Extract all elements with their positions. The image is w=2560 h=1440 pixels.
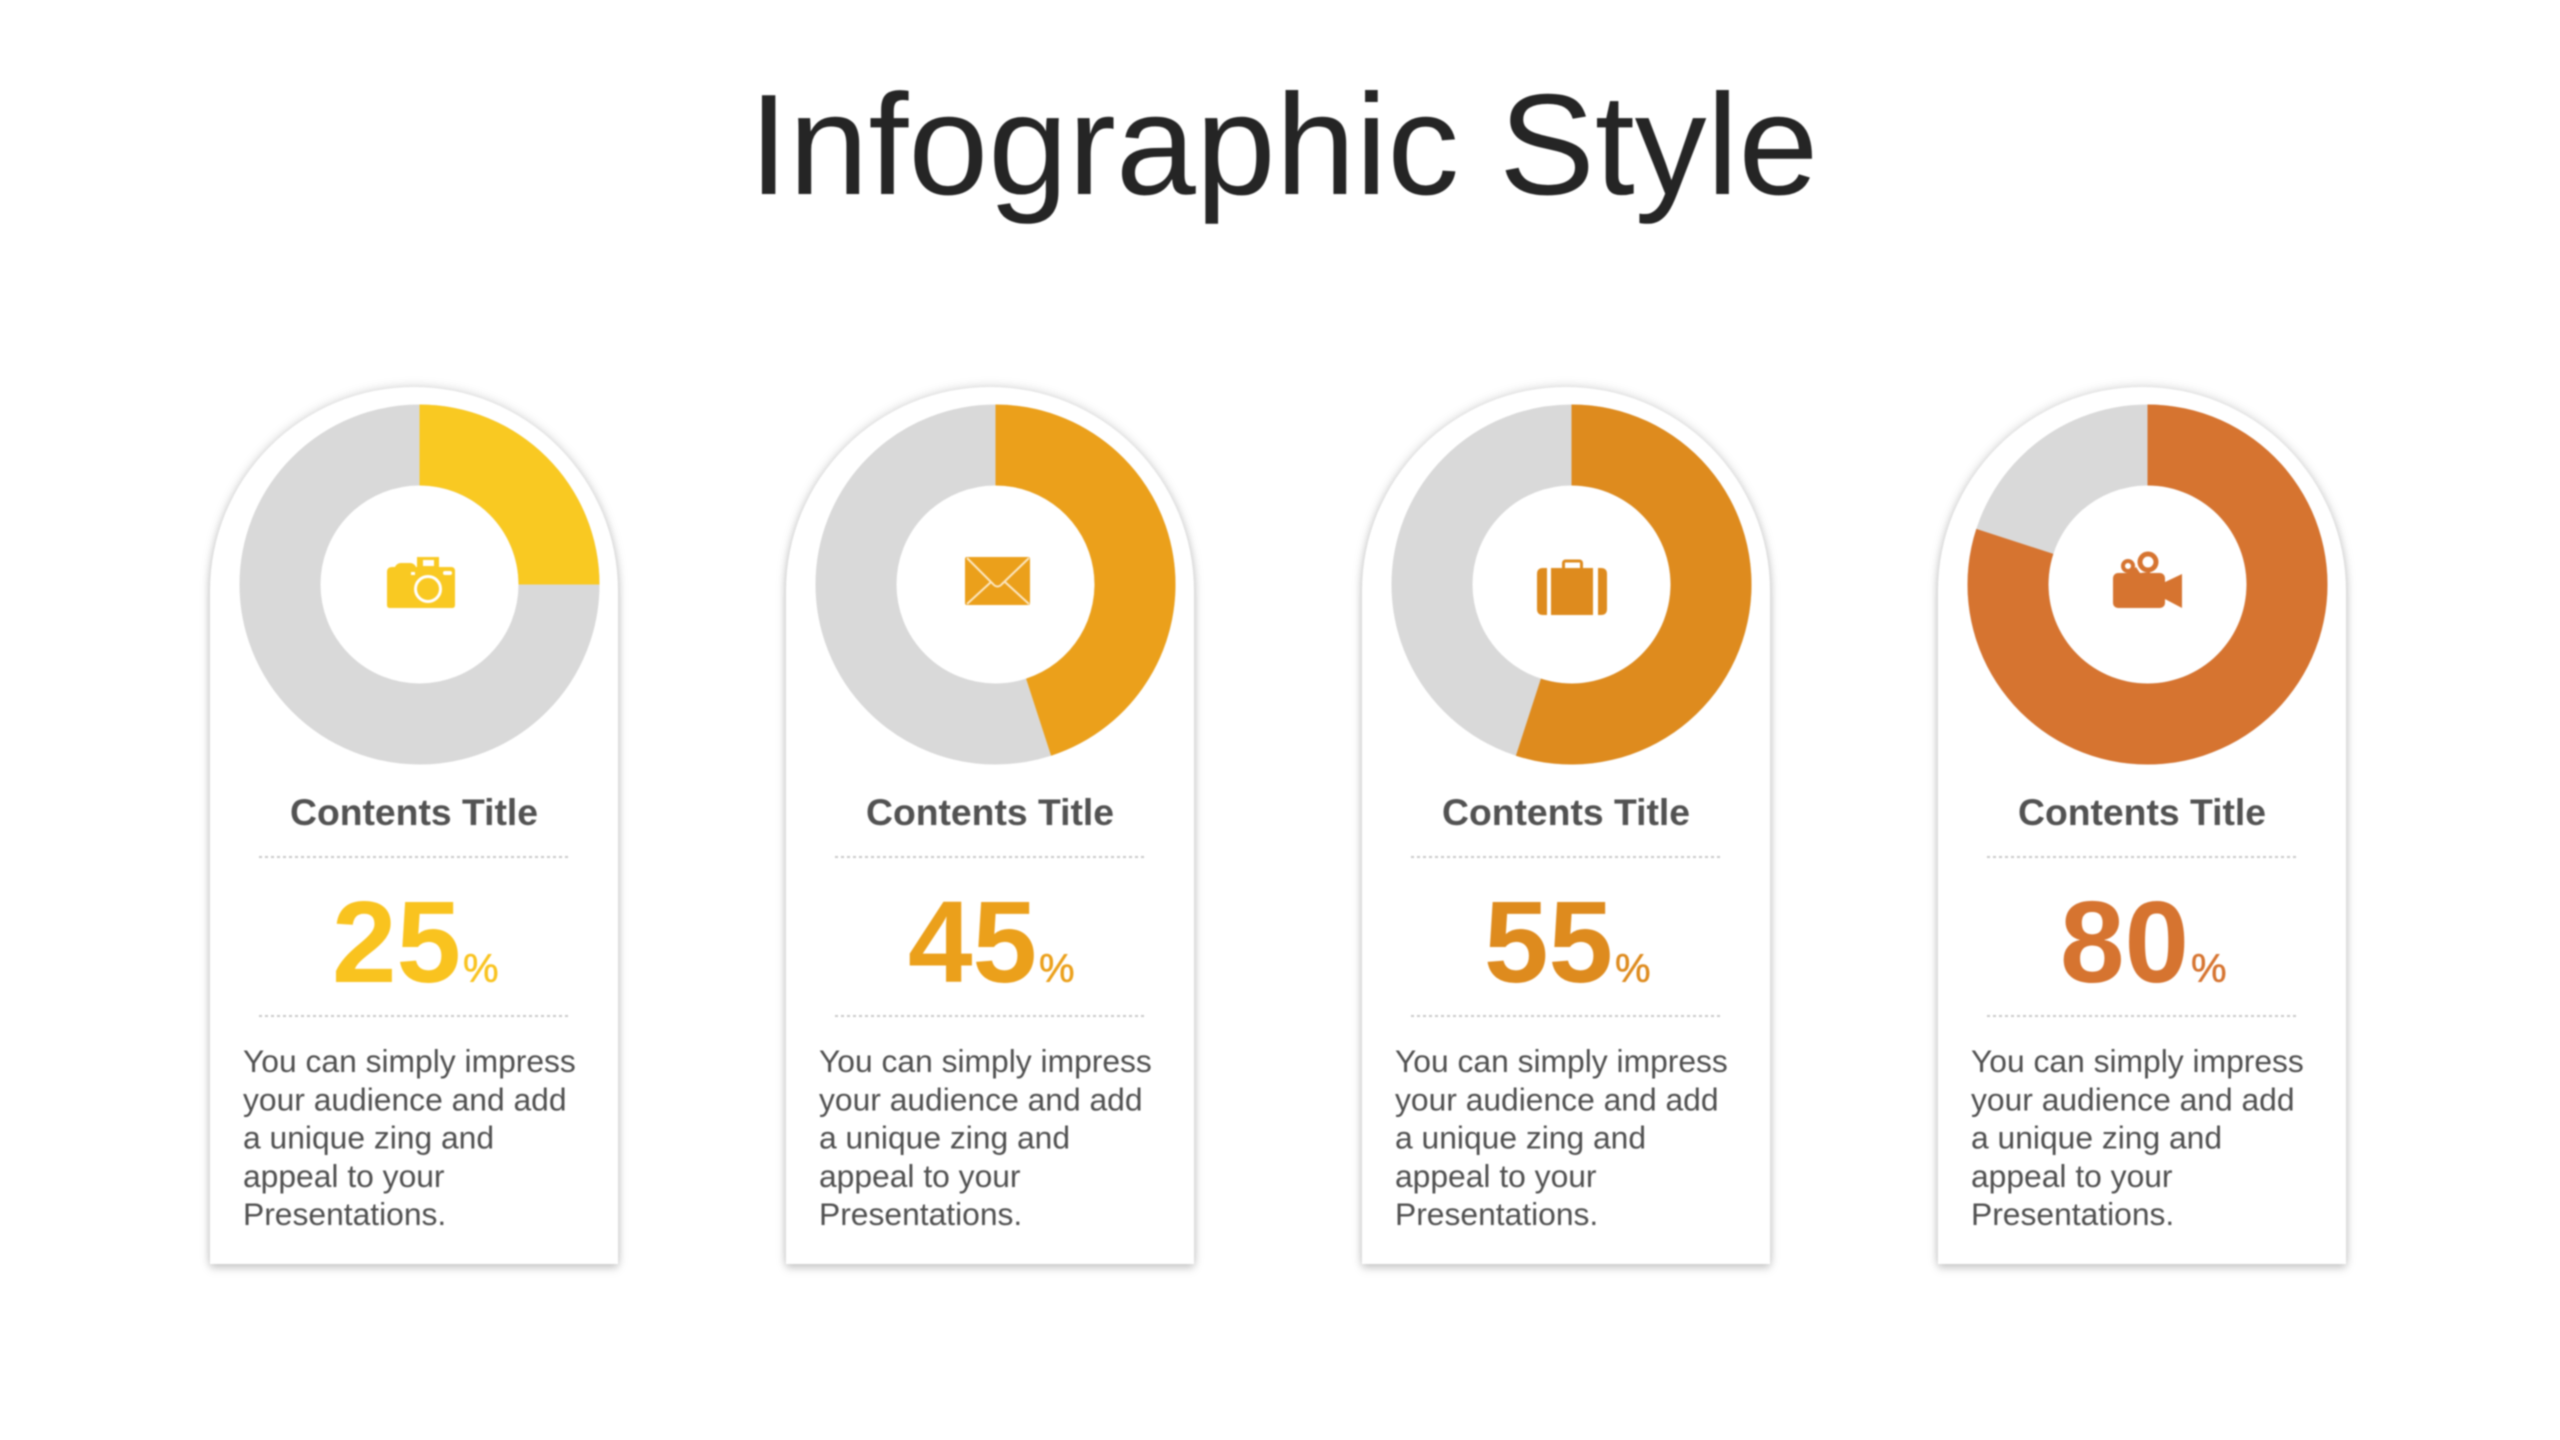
panel: card 4, 80% [1938,387,2346,1264]
panel: card 2, 45% [786,387,1194,1264]
body text: You can simply impress [819,1043,1152,1079]
title: Infographic Style [749,65,1818,225]
heading: Contents Title [290,791,538,833]
body text: Presentations. [1395,1196,1598,1232]
card background [1362,387,1770,1264]
body text: a unique zing and [819,1120,1070,1156]
body text: a unique zing and [243,1120,494,1156]
donut chart: 80% [1968,404,2328,764]
body text: a unique zing and [1971,1120,2222,1156]
body text: appeal to your [1395,1158,1597,1194]
card background [210,387,618,1264]
donut chart: 55% [1432,404,1752,764]
icon: video camera [2113,554,2182,608]
card background [1938,387,2346,1264]
donut chart: 25% [280,404,600,724]
percentage value: 80% [2060,877,2227,1007]
body text: appeal to your [1971,1158,2173,1194]
body text: your audience and add [1971,1081,2295,1117]
body text: Presentations. [1971,1196,2174,1232]
percentage value: 45% [908,877,1075,1007]
heading: Contents Title [1442,791,1690,833]
body text: Presentations. [243,1196,446,1232]
body text: You can simply impress [1395,1043,1728,1079]
body text: appeal to your [243,1158,445,1194]
body text: Presentations. [819,1196,1022,1232]
body text: your audience and add [819,1081,1143,1117]
body text: your audience and add [243,1081,567,1117]
donut chart: 45% [856,404,1175,756]
percentage value: 25% [332,877,499,1007]
card background [786,387,1194,1264]
body text: a unique zing and [1395,1120,1646,1156]
panel: card 3, 55% [1362,387,1770,1264]
heading: Contents Title [866,791,1114,833]
body text: appeal to your [819,1158,1021,1194]
percentage value: 55% [1484,877,1651,1007]
body text: your audience and add [1395,1081,1719,1117]
icon: camera [387,557,455,608]
icon: envelope [965,557,1030,605]
body text: You can simply impress [243,1043,576,1079]
heading: Contents Title [2018,791,2266,833]
panel: card 1, 25% [210,387,618,1264]
icon: briefcase [1537,561,1607,615]
body text: You can simply impress [1971,1043,2304,1079]
